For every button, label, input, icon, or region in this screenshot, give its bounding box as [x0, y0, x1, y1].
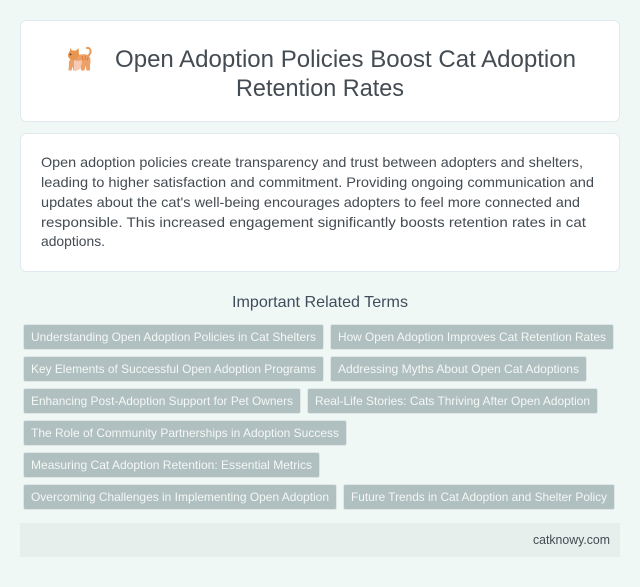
tag 7: The Role of Community Partnerships in Adoption Success: [31, 426, 339, 440]
title: Retention Rates: [236, 75, 404, 102]
footer: [20, 523, 620, 557]
tag 9: Overcoming Challenges in Implementing Open Adoption: [31, 490, 329, 504]
tag 1: Understanding Open Adoption Policies in Cat Shelters: [31, 330, 316, 344]
title: [115, 46, 576, 102]
panel: title card: [20, 20, 620, 122]
footer: catknowy.com: [533, 532, 610, 547]
tag 3: [24, 356, 324, 382]
heading: related terms: Important Related Terms: [232, 294, 408, 311]
tag 3: Key Elements of Successful Open Adoption Programs: [31, 362, 316, 376]
tag 4: [330, 356, 586, 382]
panel: summary paragraph: responsible. This increased engagement significantly boosts retention rates in cat: [41, 214, 586, 230]
tag 2: [330, 324, 614, 350]
tag 10: [344, 484, 614, 510]
tag 8: [24, 452, 320, 478]
panel: summary paragraph: leading to higher satisfaction and commitment. Providing ongoing communication and: [41, 174, 594, 190]
icon: cat: [68, 48, 91, 70]
tag 4: Addressing Myths About Open Cat Adoptions: [338, 362, 579, 376]
tag 6: [308, 388, 598, 414]
panel: summary paragraph: adoptions.: [41, 233, 105, 249]
panel: summary paragraph: updates about the cat's well-being encourages adopters to feel more connected and: [41, 194, 580, 210]
tag 5: Enhancing Post-Adoption Support for Pet Owners: [31, 394, 293, 408]
title: Open Adoption Policies Boost Cat Adoption: [115, 46, 576, 73]
panel: summary paragraph: Open adoption policies create transparency and trust between adopters and shelters,: [41, 154, 583, 170]
tag 9: [24, 484, 336, 510]
tag 8: Measuring Cat Adoption Retention: Essential Metrics: [31, 458, 312, 472]
tag 2: How Open Adoption Improves Cat Retention Rates: [338, 330, 606, 344]
tag 6: Real-Life Stories: Cats Thriving After Open Adoption: [315, 394, 590, 408]
tag 5: [24, 388, 300, 414]
tag 10: Future Trends in Cat Adoption and Shelter Policy: [351, 490, 607, 504]
panel: summary paragraph: [20, 134, 620, 272]
tag list: [24, 324, 614, 510]
tag 1: [24, 324, 324, 350]
tag 7: [24, 420, 346, 446]
